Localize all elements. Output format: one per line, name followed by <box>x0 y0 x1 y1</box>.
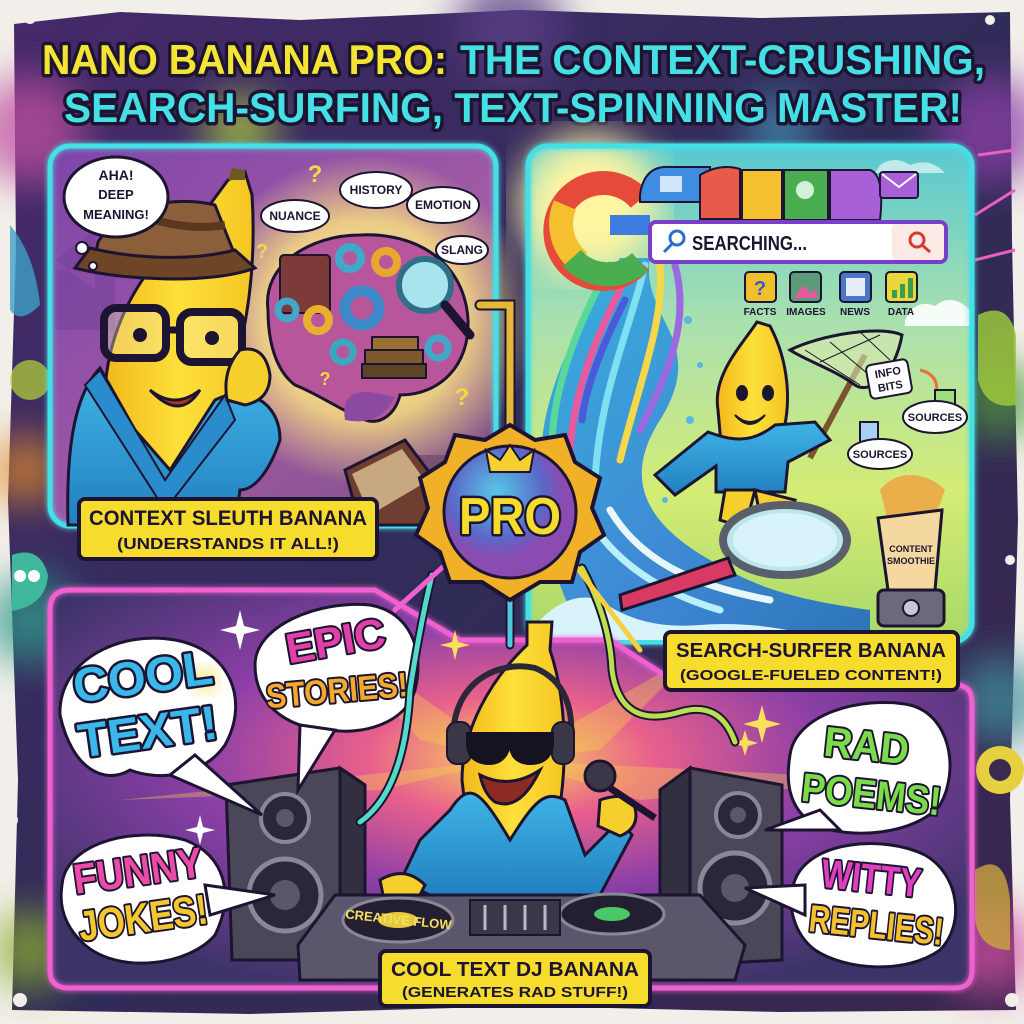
icon: surfer banana <box>655 322 830 528</box>
pro badge <box>416 425 604 600</box>
speech bubble: rad poems: RAD <box>822 718 911 773</box>
icon: dj banana <box>380 622 655 905</box>
label: context sleuth banana <box>79 499 377 559</box>
speech bubble: funny jokes: JOKES! <box>75 885 211 950</box>
icon: blender with content smoothie <box>878 475 945 626</box>
title: NANO BANANA PRO: <box>42 36 447 83</box>
floating info bits: SOURCES <box>908 412 962 424</box>
floating info bits <box>848 359 967 469</box>
speech bubble: witty replies <box>745 844 956 967</box>
floating info bits: SOURCES <box>853 449 907 461</box>
icon: dj mixer and turntables <box>298 894 745 980</box>
speech bubble: witty replies: WITTY <box>819 852 924 906</box>
panel: context sleuth banana <box>50 146 535 559</box>
label: cool text dj banana: (GENERATES RAD STUFF!) <box>402 984 628 1001</box>
search bar: SEARCHING... <box>692 233 807 255</box>
label: context sleuth banana: (UNDERSTANDS IT ALL!) <box>117 536 339 553</box>
label: cool text dj banana <box>380 951 650 1006</box>
speech bubble: rad poems <box>765 702 950 833</box>
thought clouds: keywords: HISTORY <box>350 183 402 197</box>
speech bubble: witty replies: REPLIES! <box>807 898 946 954</box>
speech bubble: cool text: TEXT! <box>75 697 221 769</box>
icon: dj mixer and turntables: CREATIVE FLOW <box>345 906 453 933</box>
thought clouds: keywords: ? <box>308 161 322 188</box>
icon: brain with gears <box>267 235 470 421</box>
speech bubble: aha: DEEP <box>98 187 134 202</box>
icons: facts images news data: NEWS <box>840 307 870 318</box>
speech bubble: aha <box>64 157 168 270</box>
connector pipes <box>360 305 735 822</box>
floating info bits: INFO <box>874 365 902 381</box>
icons: facts images news data <box>744 272 917 318</box>
floating info bits: BITS <box>877 379 904 395</box>
speech bubble: funny jokes <box>61 835 275 963</box>
title: SEARCH-SURFING, TEXT-SPINNING MASTER! <box>64 84 962 131</box>
thought clouds: keywords: ? <box>256 241 268 263</box>
icon: open book <box>345 440 435 525</box>
speech bubble: epic stories <box>255 604 418 790</box>
thought clouds: keywords: EMOTION <box>415 198 471 212</box>
speech bubble: epic stories: STORIES! <box>265 666 409 716</box>
speech bubble: funny jokes: FUNNY <box>70 838 206 903</box>
speech bubble: rad poems: POEMS! <box>799 766 943 824</box>
icons: facts images news data: FACTS <box>744 307 777 318</box>
thought clouds: keywords: ? <box>320 369 330 389</box>
icon: right speaker <box>660 768 782 965</box>
icons: facts images news data: IMAGES <box>786 307 826 318</box>
icon: sleuth banana with hat and glasses <box>68 168 280 525</box>
pro badge: PRO <box>459 488 561 546</box>
icon: left speaker <box>226 768 365 960</box>
icons: facts images news data: DATA <box>888 307 914 318</box>
icon: magnifying glass surfboard <box>620 505 847 610</box>
icon: crown <box>486 445 534 472</box>
label: search-surfer banana: SEARCH-SURFER BANANA <box>676 640 946 662</box>
icon: blender with content smoothie: SMOOTHIE <box>887 556 935 566</box>
icon: butterfly net <box>790 331 902 458</box>
icon: google G with rainbow tabs <box>555 167 918 279</box>
panel: cool text dj banana <box>50 590 972 1006</box>
label: search-surfer banana: (GOOGLE-FUELED CONTENT!) <box>680 667 942 684</box>
sparkles <box>185 610 781 845</box>
thought clouds: keywords: NUANCE <box>269 209 321 223</box>
speech bubble: epic stories: EPIC <box>282 609 389 673</box>
icons: facts images news data: ? <box>754 278 766 300</box>
icon: water wave <box>540 258 870 640</box>
speech bubble: aha: MEANING! <box>83 207 149 222</box>
thought clouds: keywords: SLANG <box>441 243 483 257</box>
title <box>42 36 985 131</box>
speech bubble: cool text <box>60 638 262 815</box>
search bar <box>650 222 946 262</box>
speech bubble: cool text: COOL <box>70 642 216 714</box>
icon: blender with content smoothie: CONTENT <box>889 544 933 554</box>
title: THE CONTEXT-CRUSHING, <box>460 36 985 83</box>
thought clouds: keywords: ? <box>455 384 469 411</box>
label: cool text dj banana: COOL TEXT DJ BANANA <box>391 959 639 981</box>
label: context sleuth banana: CONTEXT SLEUTH BANANA <box>89 507 367 530</box>
panel: search-surfer banana <box>520 135 972 642</box>
thought clouds: keywords <box>256 161 488 411</box>
label: search-surfer banana <box>665 632 958 690</box>
speech bubble: aha: AHA! <box>98 167 134 183</box>
